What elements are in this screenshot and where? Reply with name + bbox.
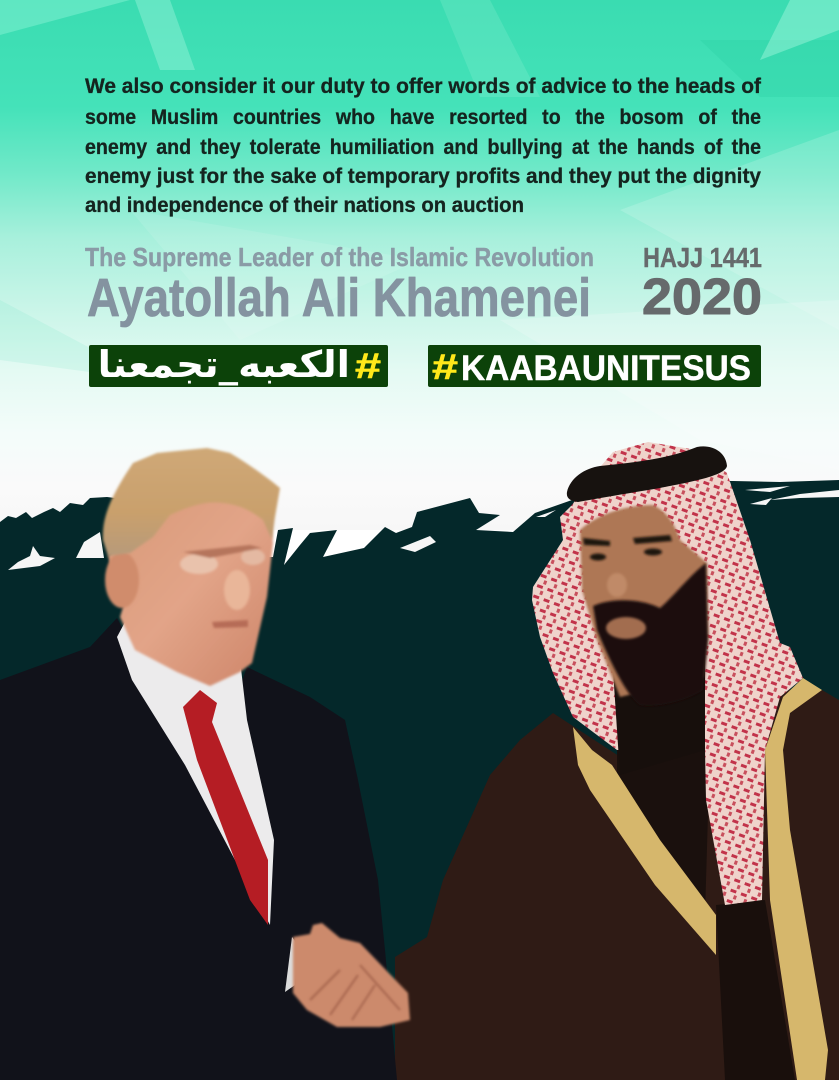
ear: [105, 552, 139, 608]
hashtag badge: Arabic: #: [355, 347, 381, 386]
hashtag badge: Arabic: الكعبه_تجمعنا: [98, 343, 350, 386]
brown robe: [395, 680, 839, 1080]
black head cord: [567, 446, 727, 502]
finger shadows: [310, 965, 400, 1020]
dark green brushed lower panel: [0, 480, 839, 1080]
background: teal faceted gradient: [0, 0, 839, 530]
dark panel beside trim: [716, 900, 795, 1080]
quote text block: We also consider it our duty to offer words of advice to the heads of: [85, 75, 762, 98]
clasped hands: [293, 923, 410, 1027]
nose highlight: [607, 573, 627, 597]
hashtag badge: Latin: #: [432, 348, 458, 387]
quote text block: and independence of their nations on auction: [85, 194, 524, 217]
suit jacket: [0, 618, 397, 1080]
brush splash: white flecks: [8, 486, 839, 570]
left gold trim: [573, 727, 716, 955]
chin: [606, 617, 646, 639]
face: [580, 505, 708, 697]
dark inner tunic: [617, 680, 712, 915]
right gold trim: [765, 678, 828, 1080]
sleeve cuff: [285, 937, 298, 992]
quote text block: enemy just for the sake of temporary profits and they put the dignity: [85, 165, 761, 188]
white shirt: [117, 622, 274, 925]
date: Hajj label: HAJJ 1441: [643, 242, 762, 273]
quote text block: some Muslim countries who have resorted to the bosom of the: [85, 106, 761, 129]
eyes and brows: [583, 535, 672, 560]
subtitle: leader title: The Supreme Leader of the Islamic Revolution: [85, 242, 594, 272]
eye sockets, nose, mouth: [180, 545, 265, 628]
red-checked headdress: [532, 442, 803, 905]
quote text block: enemy and they tolerate humiliation and bullying at the hands of the: [85, 136, 761, 159]
beard: [593, 563, 708, 706]
figure: man in robe and headdress: [395, 442, 839, 1080]
figure: man in dark suit: [0, 448, 410, 1080]
quote text block: [85, 75, 762, 217]
name heading: Ayatollah Ali Khamenei: [87, 268, 591, 328]
neck shadow: [613, 640, 705, 775]
red tie: [183, 690, 268, 925]
hashtag badge: Latin: KAABAUNITESUS: [461, 349, 751, 388]
hair: [103, 448, 280, 556]
neck and face: [108, 495, 273, 686]
date: year: 2020: [642, 268, 762, 325]
